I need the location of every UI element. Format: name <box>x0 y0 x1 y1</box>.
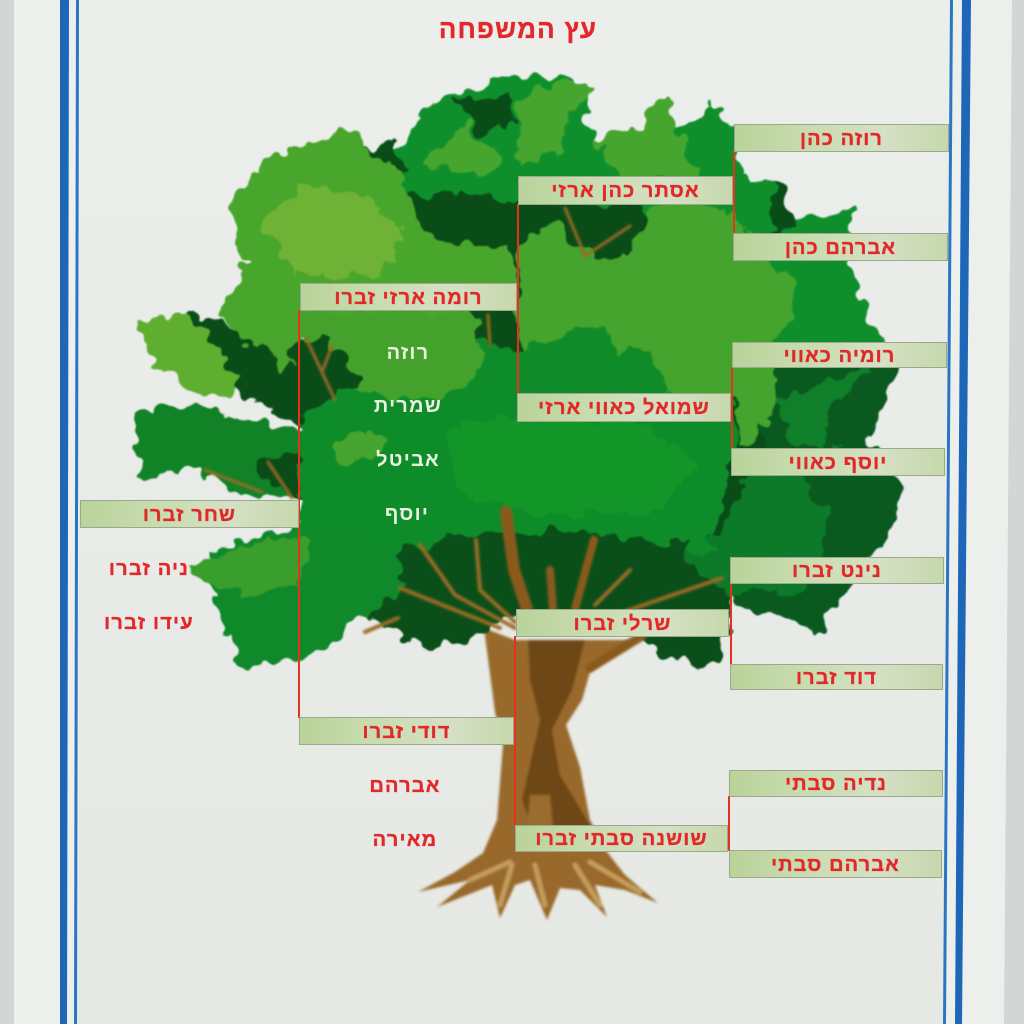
name box: Roza Cohen: רוזה כהן <box>800 128 883 150</box>
name box: David Zabaro <box>730 664 943 690</box>
name box: Ninet Zabaro: נינט זברו <box>792 560 882 582</box>
sibling name: Shimrit: שמרית <box>374 395 442 417</box>
name box: Shoshana Sabati Zabaro <box>515 825 728 852</box>
sibling name: Avital: אביטל <box>376 449 440 471</box>
name box: Romia Kawi <box>732 342 947 368</box>
connector line: Ruma and Dudi <box>298 310 300 718</box>
name box: Ruma Arazi Zabaro: רומה ארזי זברו <box>334 286 483 308</box>
name box: Shachar Zabaro <box>80 500 299 528</box>
sibling name: Avraham: אברהם <box>369 775 441 797</box>
name box: Shoshana Sabati Zabaro: שושנה סבתי זברו <box>535 828 708 850</box>
sibling name: Meira: מאירה <box>373 829 437 851</box>
name box: Ninet Zabaro <box>730 557 944 584</box>
connector line: Roza and Avraham Cohen <box>733 151 735 234</box>
name box: Avraham Sabati: אברהם סבתי <box>771 854 900 876</box>
canopy base fill <box>320 190 760 530</box>
name box: Avraham Cohen <box>733 233 948 261</box>
upper crown <box>355 82 878 350</box>
connector line: Ninet and David <box>730 583 732 665</box>
name box: Esther Cohen Arazi <box>518 176 733 205</box>
name box: Nadia Sabati <box>729 770 943 797</box>
canopy foliage <box>138 82 895 662</box>
connector line: Esther and Shmuel <box>517 204 519 394</box>
connector line: Sharli and Shoshana <box>514 636 516 826</box>
light foliage beside first generation <box>303 316 476 412</box>
tree branches <box>205 208 722 668</box>
name box: Avraham Cohen: אברהם כהן <box>785 236 896 258</box>
upper left light foliage <box>224 135 510 362</box>
name box: Nadia Sabati: נדיה סבתי <box>785 773 887 795</box>
name box: Esther Cohen Arazi: אסתר כהן ארזי <box>551 180 700 202</box>
name box: Yosef Kawi <box>731 448 945 476</box>
sibling name: Yosef: יוסף <box>385 503 429 525</box>
title: עץ המשפחה <box>439 14 597 44</box>
name box: Avraham Sabati <box>729 850 942 878</box>
connector line: Romia and Yosef <box>731 367 733 449</box>
name box: Shachar Zabaro: שחר זברו <box>143 504 236 526</box>
right dark foliage <box>690 308 895 632</box>
sibling name: Nia Zabaro: ניה זברו <box>109 558 189 580</box>
name box: Romia Kawi: רומיה כאווי <box>784 344 895 366</box>
name box: Dudi Zabaro <box>299 717 514 745</box>
connector line: Nadia and Avraham Sabati <box>728 796 730 851</box>
dark patches behind branches <box>414 198 655 345</box>
name box: Sharli Zabaro: שרלי זברו <box>574 612 671 634</box>
name box: Shmuel Kawi Arazi <box>517 393 731 422</box>
left mid foliage <box>138 315 360 498</box>
name box: David Zabaro: דוד זברו <box>796 666 877 688</box>
name box: Sharli Zabaro <box>516 609 729 637</box>
name box: Ruma Arazi Zabaro <box>300 283 517 311</box>
name box: Roza Cohen <box>734 124 949 152</box>
sibling name: Roza: רוזה <box>387 342 429 364</box>
name box: Yosef Kawi: יוסף כאווי <box>789 452 887 474</box>
name box: Shmuel Kawi Arazi: שמואל כאווי ארזי <box>538 397 710 419</box>
large central light foliage <box>522 208 792 442</box>
tree trunk and roots <box>418 628 658 920</box>
lower left foliage <box>198 530 400 660</box>
right small foliage <box>782 368 878 442</box>
dark lower canopy <box>368 515 728 662</box>
sibling name: Ido Zabaro: עידו זברו <box>104 612 194 634</box>
name box: Dudi Zabaro: דודי זברו <box>362 720 451 742</box>
big central foliage <box>303 345 735 548</box>
